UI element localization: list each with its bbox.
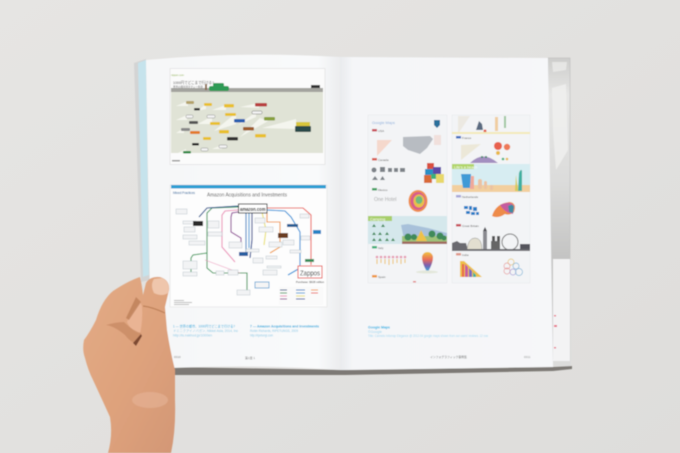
- USA section: [372, 129, 441, 156]
- caption 1: ドミニクアイノバガン, Nikkei Asia, 2014, Inc: [173, 328, 238, 333]
- hand holding the book: [83, 277, 175, 453]
- Zappos callout: Purchase: $928 million: [296, 280, 325, 284]
- caption 1: 1 — 世界の都市、1000円でどこまで行ける?: [173, 324, 235, 328]
- caption: Google Maps: ©Google: [368, 330, 382, 334]
- Mexico section: [372, 188, 428, 212]
- left page: [146, 55, 341, 370]
- chart title: 1000円でどこまで行ける?: [173, 79, 215, 85]
- France section: [456, 136, 510, 163]
- Italy section: Italy: [378, 246, 384, 250]
- Netherlands section: [456, 195, 515, 217]
- caption: Google Maps: Google Maps: [368, 326, 390, 330]
- top illustration: [452, 116, 530, 134]
- Camping banner: [368, 216, 447, 244]
- caption: Google Maps: [368, 326, 489, 338]
- map title: Amazon Acquisitions and Investments: [207, 192, 287, 198]
- right page: [340, 57, 553, 370]
- infographic: 1000 yen taxi chart: 世界の都市別タクシー料金: [173, 84, 203, 88]
- Life's a beach banner: Life's a beach: [454, 165, 477, 169]
- white inner sheet with pink marks: [553, 259, 570, 361]
- amazon.com logo box: [238, 204, 267, 213]
- taxi icons: [176, 83, 320, 154]
- caption: Google Maps: Title: Carmelo Infomap Elegance @ 2012-04 google maps shown from our users' reviews. 12 row: [368, 334, 489, 338]
- thumb knuckle crease: [143, 306, 165, 313]
- Great Britain section: [452, 224, 530, 251]
- map brand: Mixed Practices: [173, 191, 195, 195]
- Canada section: Canada: [378, 158, 389, 162]
- caption 1: [173, 324, 238, 338]
- Canada section: [372, 158, 444, 183]
- Spain section: Spain: [378, 275, 386, 279]
- second finger: [127, 302, 142, 334]
- crease between fingers: [106, 322, 141, 344]
- Google Maps header: Google Maps: [372, 120, 395, 125]
- Life's a beach banner: [452, 164, 530, 192]
- subway lines: [191, 206, 311, 290]
- infographic: Google Maps right column: [452, 115, 530, 283]
- Great Britain section: Great Britain: [462, 224, 479, 228]
- Italy section: [372, 246, 438, 274]
- page number left: 0310: [174, 355, 181, 359]
- infographic: Google Maps left column: [368, 115, 447, 283]
- amazon.com logo box: amazon.com: [240, 207, 266, 213]
- caption 1: http://is.nakhod.jp/1000en: [173, 334, 212, 338]
- caption 2: http://ripetungi.com: [250, 334, 273, 338]
- wrist highlight: [132, 392, 168, 408]
- small credit: [174, 300, 192, 305]
- Camping banner: Camping: [370, 217, 385, 221]
- footer left: 第1章 1: [245, 355, 255, 360]
- India section: India: [462, 253, 469, 257]
- caption 2: 7 — Amazon Acquisitions and Investments: [250, 324, 319, 328]
- France section: France: [462, 136, 472, 140]
- shadow next to finger: [126, 297, 141, 320]
- infographic: 1000 yen taxi chart: [170, 68, 325, 164]
- Zappos callout: Zappos: [300, 270, 320, 278]
- USA section: USA: [378, 129, 384, 133]
- thumb nail: [152, 278, 169, 295]
- infographic: 1000 yen taxi chart: nippon.com: [171, 74, 184, 77]
- footer title right: インフォグラフィック事例集: [430, 354, 467, 359]
- caption 2: Robin Richards, RIPETUNGS, 2009: [250, 329, 298, 333]
- Spain section: [372, 275, 416, 282]
- infographic: Amazon Acquisitions and Investments: [170, 185, 327, 307]
- India section: [456, 253, 522, 277]
- caption 2: [250, 324, 319, 338]
- Mexico section: One Hotel: [374, 197, 397, 203]
- acquisition labels: [176, 209, 310, 295]
- book shadow: [170, 366, 572, 375]
- page number right: 0311: [524, 355, 531, 359]
- Netherlands section: Netherlands: [462, 195, 479, 199]
- Mexico section: Mexico: [378, 188, 388, 192]
- Zappos callout: [296, 266, 325, 284]
- legend: [279, 287, 323, 305]
- clear plastic jacket, left side: [134, 59, 150, 282]
- clear plastic jacket, right side: [548, 58, 571, 366]
